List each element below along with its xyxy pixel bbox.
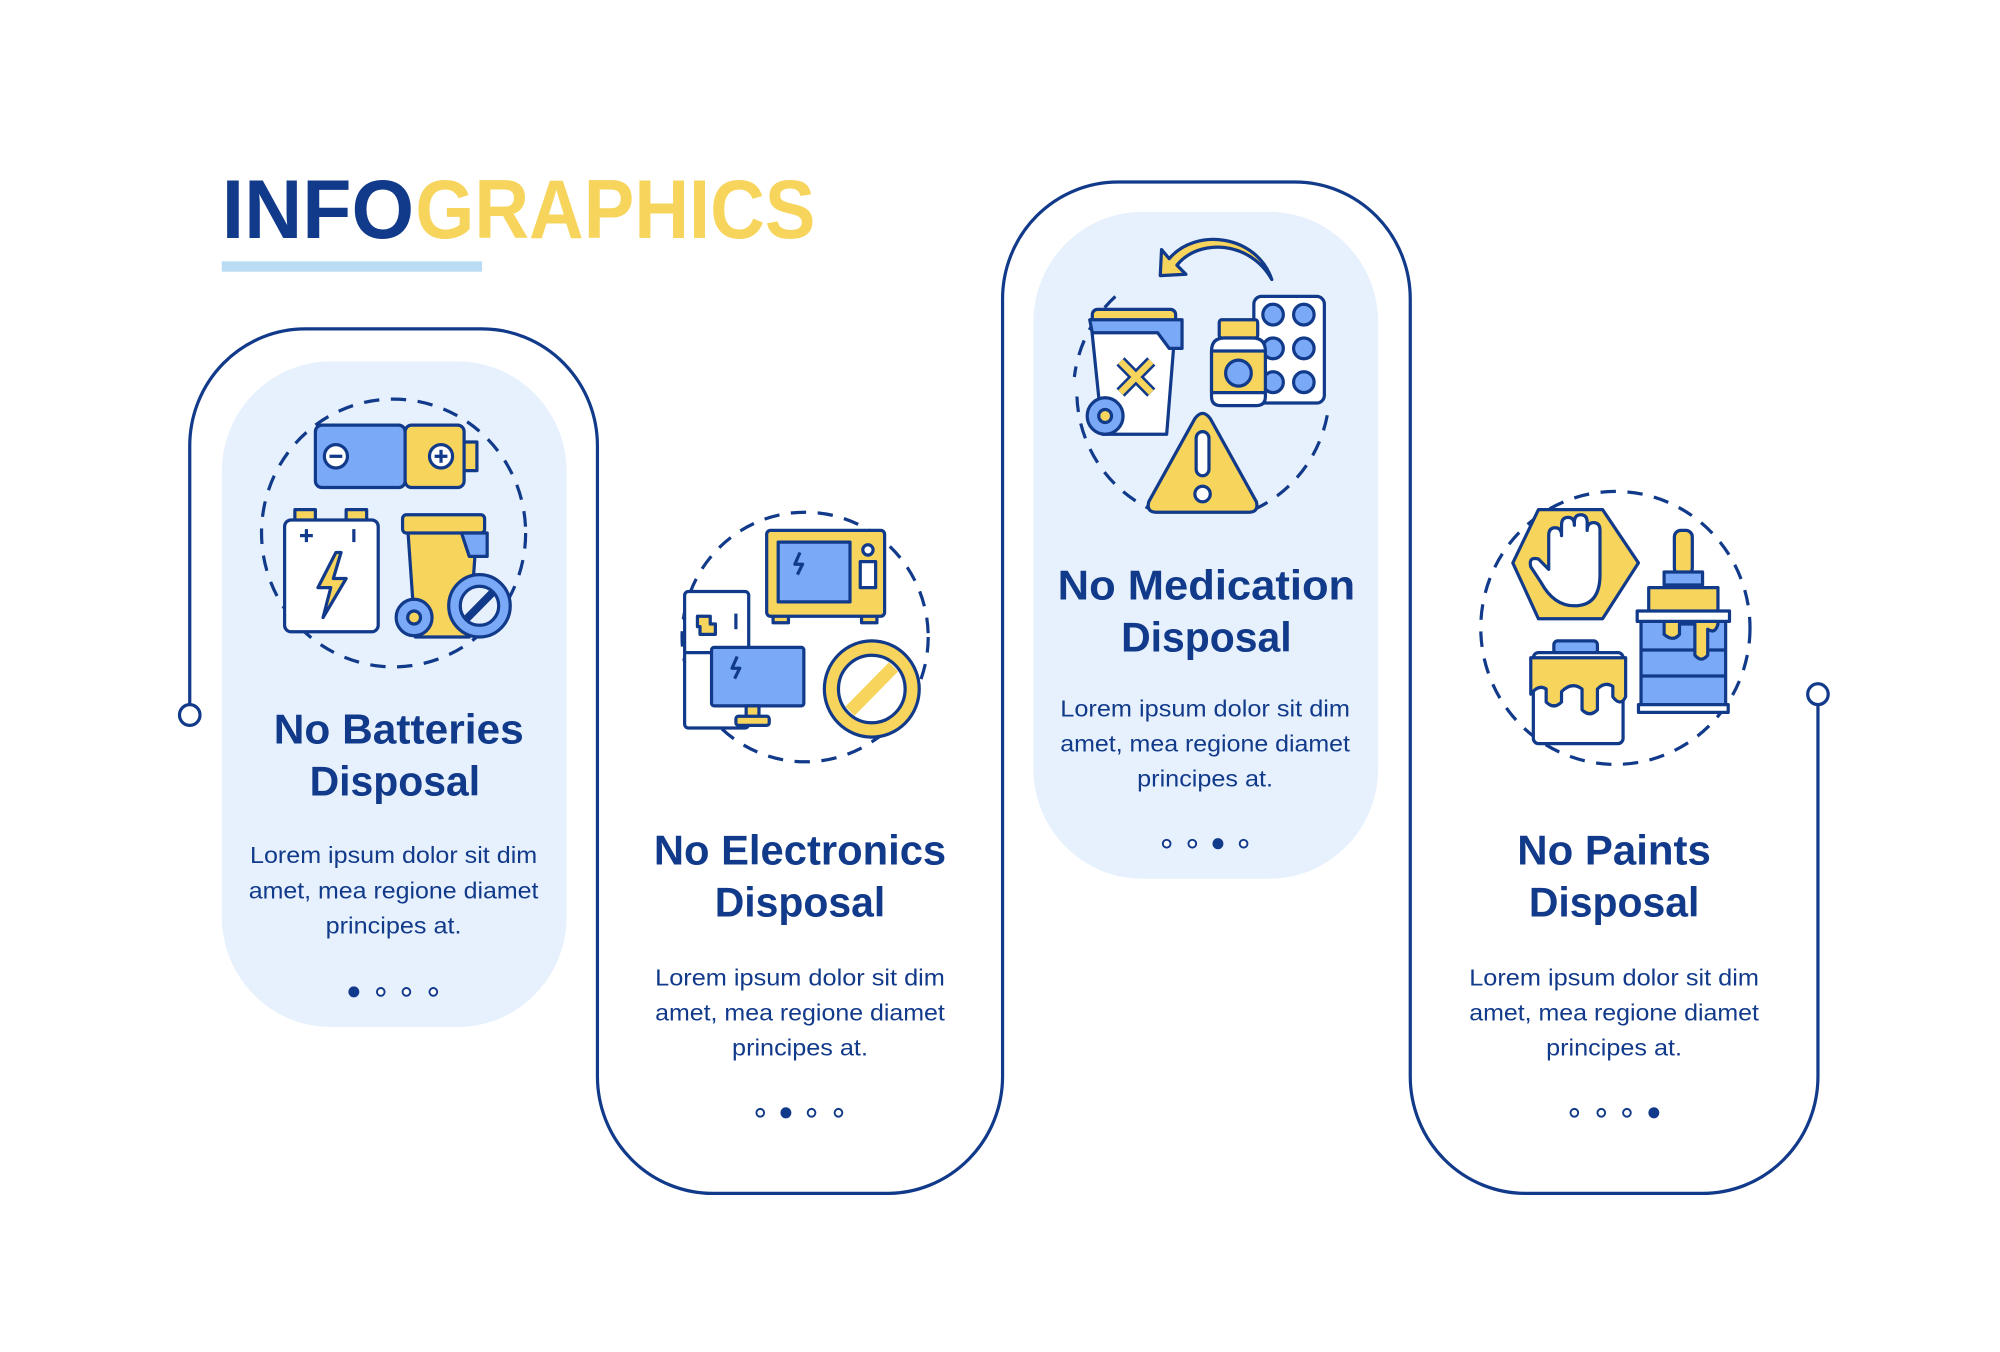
card 2: No Electronics Disposal: principes at. bbox=[732, 1034, 868, 1061]
title underline bbox=[222, 261, 482, 272]
panel fill: batteries bbox=[222, 361, 567, 1027]
dots 4 bbox=[1571, 1108, 1658, 1117]
card 4: No Paints Disposal: Lorem ipsum dolor sit dim bbox=[1469, 964, 1759, 990]
card 3: No Medication Disposal: Disposal bbox=[1121, 614, 1292, 660]
dots 3 bbox=[1163, 839, 1247, 848]
card 1: No Batteries Disposal: No Batteries bbox=[274, 706, 524, 753]
card 4: No Paints Disposal: amet, mea regione diamet bbox=[1469, 999, 1760, 1026]
dots 1 bbox=[349, 987, 437, 996]
end node bbox=[1808, 684, 1828, 705]
dots 2 bbox=[756, 1108, 842, 1117]
card 1: No Batteries Disposal: principes at. bbox=[326, 912, 462, 938]
start node bbox=[179, 705, 200, 725]
card 1: No Batteries Disposal: Lorem ipsum dolor sit dim bbox=[250, 842, 537, 868]
icon: electronics bbox=[682, 512, 928, 762]
card 1: No Batteries Disposal bbox=[249, 706, 539, 938]
card 4: No Paints Disposal: Disposal bbox=[1529, 879, 1699, 926]
title: INFO bbox=[222, 162, 414, 256]
card 4: No Paints Disposal bbox=[1469, 827, 1760, 1061]
card 1: No Batteries Disposal: amet, mea regione diamet bbox=[249, 877, 539, 903]
icon: medication bbox=[1074, 239, 1328, 512]
title bbox=[222, 162, 815, 256]
icon: batteries bbox=[262, 399, 526, 667]
card 2: No Electronics Disposal bbox=[654, 827, 946, 1061]
card 1: No Batteries Disposal: Disposal bbox=[310, 758, 480, 805]
card 3: No Medication Disposal: Lorem ipsum dolor sit dim bbox=[1060, 695, 1350, 721]
card 2: No Electronics Disposal: Lorem ipsum dolor sit dim bbox=[655, 964, 945, 990]
card 2: No Electronics Disposal: Disposal bbox=[715, 879, 885, 926]
card 3: No Medication Disposal bbox=[1058, 562, 1355, 792]
card 3: No Medication Disposal: principes at. bbox=[1137, 765, 1273, 792]
title: GRAPHICS bbox=[415, 162, 815, 256]
card 3: No Medication Disposal: No Medication bbox=[1058, 562, 1355, 608]
card 3: No Medication Disposal: amet, mea regione diamet bbox=[1060, 730, 1351, 756]
card 2: No Electronics Disposal: amet, mea regione diamet bbox=[655, 999, 945, 1026]
icon: paints bbox=[1481, 491, 1750, 764]
card 2: No Electronics Disposal: No Electronics bbox=[654, 827, 946, 874]
snake outline connecting cards bbox=[190, 182, 1818, 1193]
panel fill: medication bbox=[1033, 212, 1378, 879]
card 4: No Paints Disposal: No Paints bbox=[1517, 827, 1711, 874]
card 4: No Paints Disposal: principes at. bbox=[1546, 1034, 1682, 1061]
